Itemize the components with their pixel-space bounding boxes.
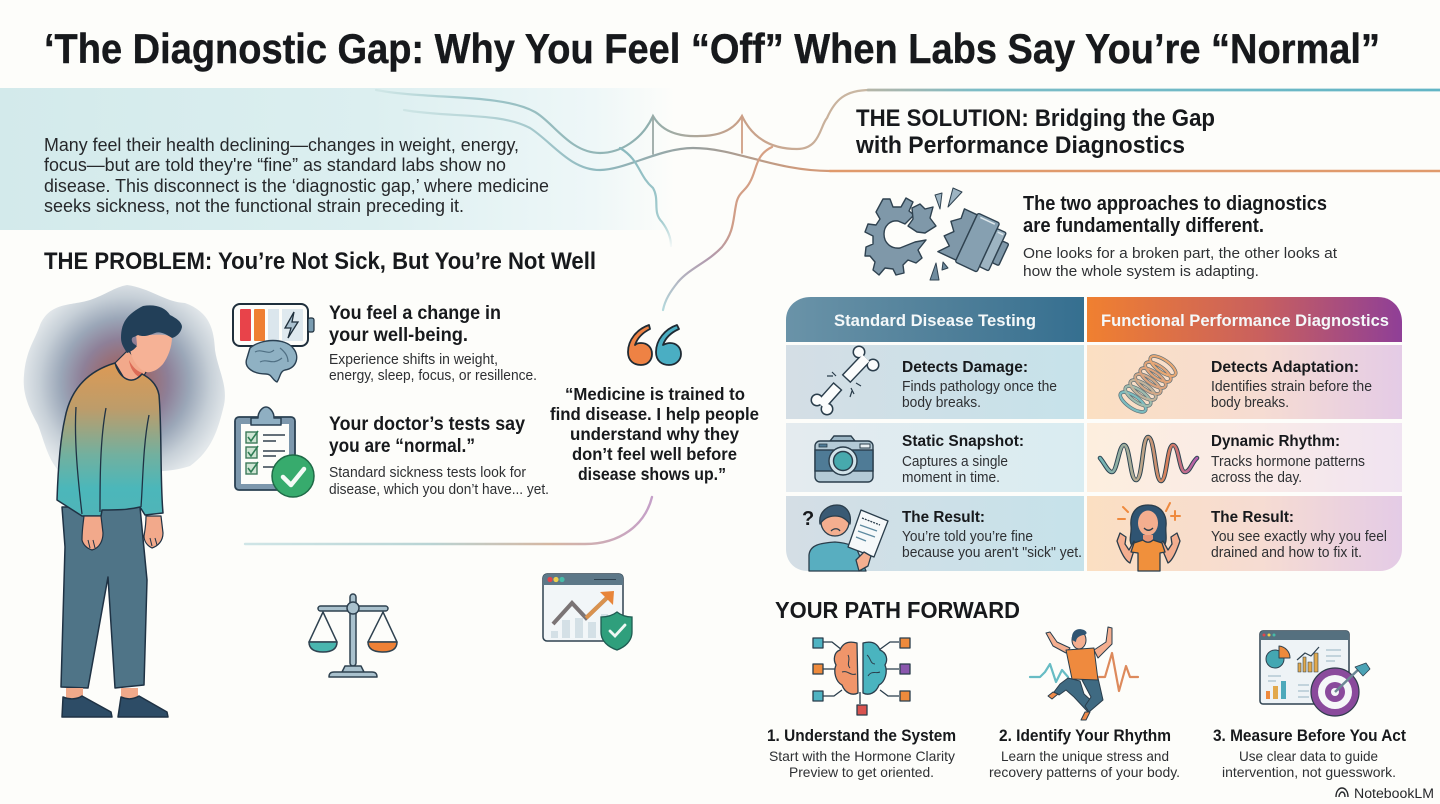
intro text: seeks sickness, not the functional strain preceding it. (44, 196, 464, 216)
icon: broken gear and piston (865, 188, 1015, 280)
row: the result: You see exactly why you feel (1211, 529, 1387, 545)
step 3: measure before you act (1213, 631, 1406, 780)
hair (121, 305, 182, 353)
quote: understand why they (570, 424, 739, 444)
icon: jumping man with pulse lines (1030, 627, 1138, 720)
text: two approaches: how the whole system is adapting. (1023, 263, 1259, 280)
row: detects damage: body breaks. (902, 395, 981, 411)
quote: don’t feel well before (572, 444, 737, 464)
row: the result: The Result: (902, 509, 985, 526)
icon: balance scales (309, 594, 397, 677)
notebooklm logo: NotebookLM (1354, 786, 1434, 801)
icon: dashboard with target (1260, 631, 1370, 716)
text: doctor's tests: disease, which you don’t have... yet. (329, 482, 549, 498)
intro text: disease. This disconnect is the ‘diagnostic gap,’ where medicine (44, 176, 549, 196)
intro text (44, 135, 549, 216)
text: doctor's tests (329, 413, 549, 498)
heading: the solution: with Performance Diagnostics (855, 132, 1185, 159)
text: you feel a change: Experience shifts in weight, (329, 352, 498, 368)
step 2: identify your rhythm: Learn the unique stress and (1001, 748, 1169, 764)
icon: confused person with report (809, 505, 888, 571)
text: you feel a change: your well-being. (329, 324, 468, 346)
hands (82, 516, 103, 550)
icon: chart with shield (543, 574, 632, 650)
row: static snapshot: moment in time. (902, 470, 1000, 486)
quote: “Medicine is trained to (565, 384, 745, 404)
step 3: measure before you act: 3. Measure Before You Act (1213, 727, 1406, 745)
icon: energized woman (1117, 505, 1180, 571)
row: detects adaptation: Identifies strain before the (1211, 379, 1372, 395)
row: detects damage (786, 345, 1084, 419)
text: you feel a change: You feel a change in (329, 302, 501, 324)
heading: your path forward: YOUR PATH FORWARD (775, 597, 1020, 623)
text: two approaches: are fundamentally different. (1023, 215, 1264, 237)
neck (115, 350, 146, 383)
text: doctor's tests: you are “normal.” (329, 435, 475, 457)
row: the result: because you aren't "sick" yet. (902, 545, 1082, 561)
row: detects damage: Detects Damage: (902, 359, 1028, 376)
row: the result (1087, 496, 1402, 571)
row: static snapshot: Captures a single (902, 454, 1008, 470)
header: Standard Disease Testing (834, 311, 1036, 330)
sweater (57, 363, 163, 516)
header: Functional Performance Diagnostics (1101, 311, 1389, 330)
intro text: focus—but are told they're “fine” as standard labs show no (44, 155, 506, 175)
header (786, 297, 1084, 342)
text: doctor's tests: Standard sickness tests look for (329, 465, 526, 481)
row: dynamic rhythm (1087, 423, 1402, 492)
heading: the problem: THE PROBLEM: You’re Not Sick, But You’re Not Well (44, 248, 596, 275)
icon: broken bone (810, 346, 880, 416)
icon: clipboard with check (235, 407, 314, 497)
step 1: understand the system (767, 638, 956, 780)
icon: camera (815, 436, 873, 482)
header (1087, 297, 1402, 342)
step 2: identify your rhythm (989, 627, 1180, 780)
text: two approaches: One looks for a broken part, the other looks at (1023, 245, 1338, 262)
icon: hormone wave (1100, 437, 1197, 481)
panel: intro band (0, 88, 675, 230)
row: the result: The Result: (1211, 509, 1294, 526)
row: detects adaptation: Detects Adaptation: (1211, 359, 1359, 376)
icon: quotation marks (628, 325, 681, 365)
text: doctor's tests: Your doctor’s tests say (329, 413, 525, 435)
text: two approaches: The two approaches to diagnostics (1023, 193, 1327, 215)
step 3: measure before you act: Use clear data to guide (1239, 748, 1378, 764)
step 1: understand the system: Start with the Hormone Clarity (769, 748, 955, 764)
text: you feel a change (329, 302, 537, 384)
bridge and connecting lines (245, 90, 1440, 544)
row: detects adaptation: body breaks. (1211, 395, 1289, 411)
panel: functional performance diagnostics column (1087, 297, 1402, 571)
heading: the solution: THE SOLUTION: Bridging the Gap (856, 105, 1215, 132)
row: the result: drained and how to fix it. (1211, 545, 1362, 561)
icon: spring (1117, 352, 1179, 416)
row: dynamic rhythm: Dynamic Rhythm: (1211, 433, 1340, 450)
heading: the solution (855, 105, 1215, 159)
intro text: Many feel their health declining—changes in weight, energy, (44, 135, 519, 155)
step 3: measure before you act: intervention, not guesswork. (1222, 764, 1396, 780)
row: the result: ? (802, 508, 814, 530)
quote: find disease. I help people (550, 404, 759, 424)
step 2: identify your rhythm: 2. Identify Your Rhythm (999, 727, 1171, 745)
row: dynamic rhythm: across the day. (1211, 470, 1302, 486)
row: detects damage: Finds pathology once the (902, 379, 1057, 395)
illustration: tired person with aura (24, 285, 225, 717)
quote (550, 384, 759, 484)
panel: standard disease testing column (786, 297, 1084, 571)
step 1: understand the system: Preview to get oriented. (789, 764, 934, 780)
row: static snapshot (786, 423, 1084, 492)
text: you feel a change: energy, sleep, focus, or resillence. (329, 368, 537, 384)
step 2: identify your rhythm: recovery patterns of your body. (989, 764, 1180, 780)
face (130, 334, 172, 372)
shoes (62, 696, 168, 717)
icon: battery and brain (233, 304, 314, 382)
row: dynamic rhythm: Tracks hormone patterns (1211, 454, 1365, 470)
quote: disease shows up.” (578, 464, 726, 484)
icon: brain with nodes (813, 638, 910, 715)
row: the result (786, 496, 1084, 571)
row: detects adaptation (1087, 345, 1402, 419)
step 1: understand the system: 1. Understand the System (767, 727, 956, 745)
row: the result: You’re told you’re fine (902, 529, 1033, 545)
text: two approaches (1023, 193, 1338, 280)
legs (61, 507, 147, 688)
row: static snapshot: Static Snapshot: (902, 433, 1024, 450)
